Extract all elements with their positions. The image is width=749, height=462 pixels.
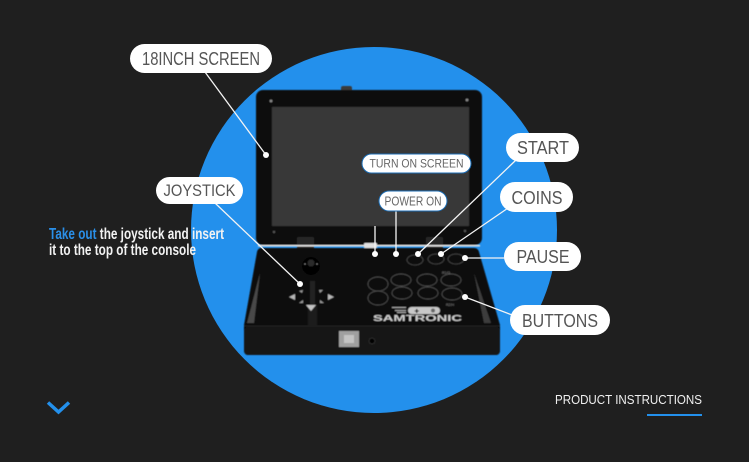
icon: down chevron: [48, 402, 69, 412]
label: 18 inch screen: 18INCH SCREEN: [142, 49, 260, 69]
label: power on: [379, 191, 447, 211]
console product illustration: [244, 86, 500, 355]
label: 18 inch screen: [130, 44, 272, 73]
label: pause: [504, 242, 581, 271]
label: start: [506, 133, 579, 162]
system buttons row: [407, 254, 464, 265]
instruction text: it to the top of the console: [49, 242, 196, 259]
label: coins: [500, 182, 573, 212]
samtronic logo: [373, 271, 462, 323]
label: joystick: JOYSTICK: [164, 181, 236, 200]
instruction text: Take out the joystick and insert: [49, 226, 224, 243]
instruction text: [49, 226, 224, 259]
blue circle backdrop: [191, 47, 557, 413]
front panel port: [339, 331, 375, 347]
label: buttons: BUTTONS: [522, 311, 598, 331]
label: turn on screen: [362, 154, 471, 173]
label: buttons: [510, 305, 610, 335]
action buttons grid: [368, 274, 462, 305]
hinges: [258, 237, 480, 250]
console base: [244, 248, 500, 355]
samtronic logo: SAMTRONIC: [373, 314, 462, 323]
label: start: START: [517, 138, 569, 158]
samtronic logo: R1/G: [442, 271, 450, 275]
samtronic logo: R2/H: [446, 303, 454, 307]
footer heading: product instructions: PRODUCT INSTRUCTIONS: [555, 393, 702, 407]
label: power on: POWER ON: [384, 194, 442, 208]
label: turn on screen: TURN ON SCREEN: [370, 156, 464, 170]
console lid with screen: [256, 86, 482, 245]
joystick: [289, 257, 334, 325]
label: joystick: [156, 177, 243, 204]
label: pause: PAUSE: [516, 247, 570, 267]
leader lines and dots: [205, 72, 516, 315]
label: coins: COINS: [512, 188, 562, 208]
